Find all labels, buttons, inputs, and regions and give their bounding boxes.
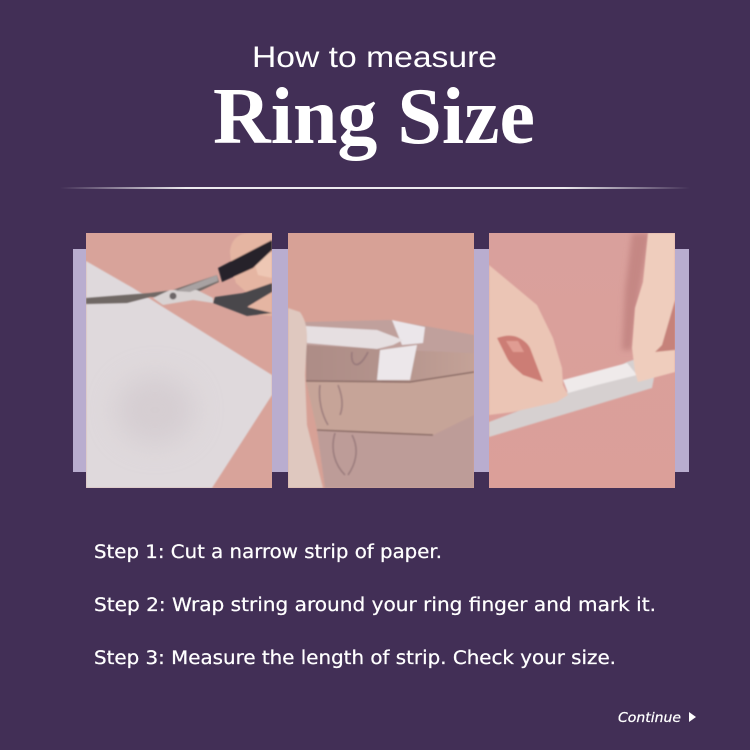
step 2: Step 2: Wrap string around your ring finger and mark it.	[94, 595, 656, 616]
scissor handle upper	[218, 240, 272, 282]
pen	[305, 326, 403, 349]
gap in left hand	[497, 336, 543, 382]
scissor handle lower	[213, 283, 272, 316]
paper strip	[563, 363, 637, 393]
title: Ring Size: Ring Size	[213, 71, 535, 161]
photo 3: measuring strip against ruler	[489, 233, 675, 488]
little finger	[317, 415, 474, 488]
panel backing: lilac strip	[73, 249, 689, 472]
continue link: Continue	[618, 710, 681, 726]
step 1: Step 1: Cut a narrow strip of paper.	[94, 542, 442, 563]
thumb	[288, 308, 323, 488]
paper sheet	[86, 261, 272, 488]
middle finger	[306, 372, 474, 435]
icon: arrow	[689, 712, 696, 722]
step 3: Step 3: Measure the length of strip. Check your size.	[94, 648, 616, 669]
paper strip	[392, 320, 425, 345]
hand holding scissors	[230, 233, 272, 316]
right hand	[632, 233, 675, 382]
photo 1: scissors cutting paper	[86, 233, 272, 488]
photo 2: paper strip wrapped around finger	[288, 233, 474, 488]
finger creases	[306, 372, 474, 435]
shadow	[622, 233, 650, 350]
back finger	[305, 320, 474, 353]
left hand	[489, 265, 568, 415]
ring finger	[306, 345, 474, 382]
heading: How to measure: How to measure	[252, 41, 497, 74]
ruler	[489, 360, 654, 438]
scissor blades	[86, 275, 219, 304]
